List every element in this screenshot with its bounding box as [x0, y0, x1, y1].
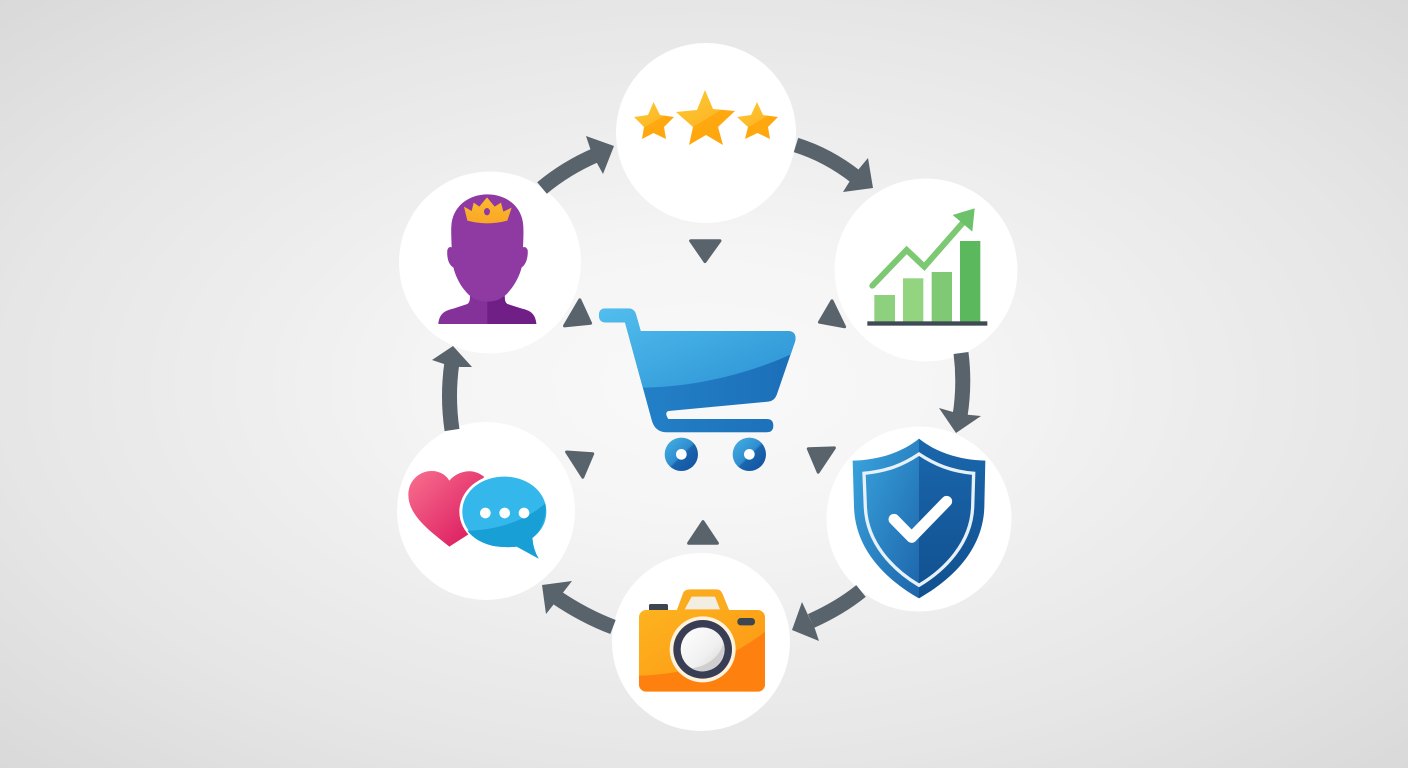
cart wheel right [733, 438, 766, 471]
icon: chat bubble [459, 474, 549, 559]
node: heart and chat circle [397, 422, 575, 600]
pointer: from person [564, 300, 591, 326]
cart body [599, 308, 796, 432]
pointer: from stars [691, 241, 720, 262]
pointer: from heart [567, 452, 593, 477]
arrow: chart to shield [939, 353, 981, 433]
icon: three stars [634, 90, 778, 145]
node: stars circle [616, 43, 796, 223]
node: camera circle [612, 553, 790, 731]
pointer: from camera [689, 522, 717, 543]
cart wheel left [665, 438, 698, 471]
node: VIP person circle [399, 172, 581, 354]
icon: camera [639, 589, 765, 692]
arrow: camera to heart [542, 581, 613, 627]
icon: person with crown [438, 194, 536, 324]
arrow: stars to chart [796, 145, 873, 192]
cycle diagram [397, 43, 1018, 731]
icon: shield with check [853, 439, 985, 598]
icon: growth bar chart [867, 208, 987, 326]
node: growth chart circle [834, 178, 1018, 362]
arrow: shield to camera [792, 591, 861, 641]
icon: heart [408, 471, 549, 559]
arrow: person to stars [542, 136, 614, 188]
arrow: heart to person [432, 346, 472, 430]
icon: shopping cart [599, 308, 796, 471]
pointer: from chart [819, 301, 845, 327]
pointer: from shield [808, 448, 834, 472]
node: shield circle [826, 426, 1012, 612]
